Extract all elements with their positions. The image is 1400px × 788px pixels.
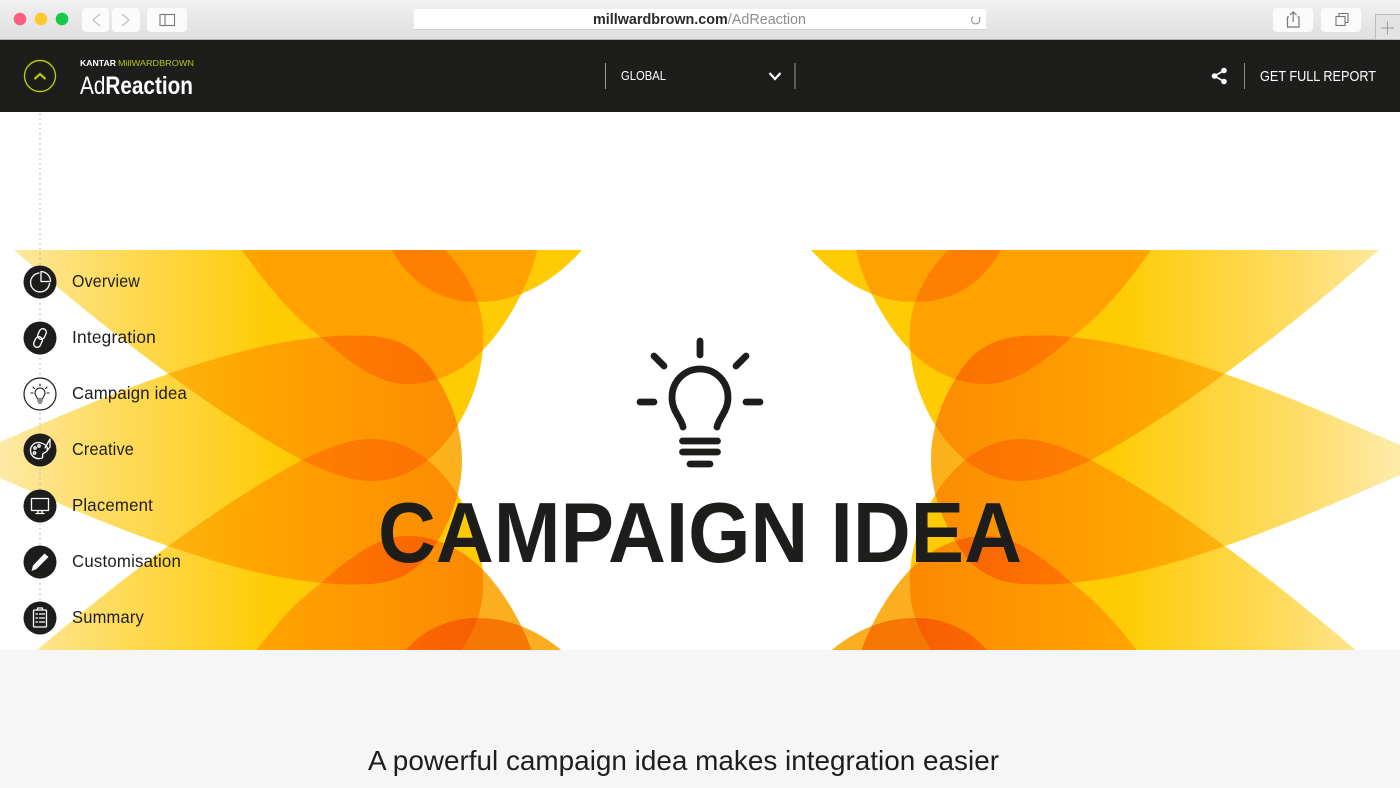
icon: share [1212, 68, 1227, 84]
nav item: overview [24, 266, 140, 298]
nav item: placement: Placement [72, 495, 153, 515]
region selector: GLOBAL [621, 69, 666, 83]
nav item: campaign idea: Campaign idea [72, 383, 187, 403]
nav item: summary [24, 602, 144, 634]
tabs button [1321, 8, 1361, 32]
navigation [24, 113, 187, 634]
icon: light bulb [640, 341, 760, 464]
sidebar button [147, 8, 187, 32]
nav item: creative [24, 434, 134, 466]
petals: right side [811, 250, 1400, 670]
nav item: campaign idea [24, 378, 187, 410]
petals: left side [0, 250, 582, 670]
nav item: summary: Summary [72, 607, 144, 627]
nav item: integration [24, 322, 156, 354]
url: millwardbrown.com/AdReaction [593, 12, 806, 28]
address bar [414, 9, 986, 30]
nav item: creative: Creative [72, 439, 134, 459]
site header bar [0, 40, 1400, 112]
nav item: integration: Integration [72, 327, 156, 347]
new tab button [1376, 14, 1400, 40]
logo: MillWARDBROWN [118, 58, 194, 68]
nav item: customisation: Customisation [72, 551, 181, 571]
hero petals [0, 250, 1400, 670]
logo: KANTAR [80, 58, 116, 68]
nav item: overview: Overview [72, 271, 140, 291]
region selector [606, 63, 795, 89]
back and forward buttons [82, 8, 140, 32]
report link: GET FULL REPORT [1260, 69, 1376, 85]
nav item: placement [24, 490, 153, 522]
icon: scroll up [24, 60, 56, 92]
logo [80, 58, 194, 100]
window controls [14, 13, 68, 25]
nav item: customisation [24, 546, 181, 578]
subheading: A powerful campaign idea makes integration easier [368, 745, 999, 776]
share button [1273, 8, 1313, 32]
browser toolbar [0, 0, 1400, 40]
lower section background [0, 650, 1400, 788]
logo: AdReaction [80, 72, 193, 100]
title: CAMPAIGN IDEA [378, 486, 1022, 581]
